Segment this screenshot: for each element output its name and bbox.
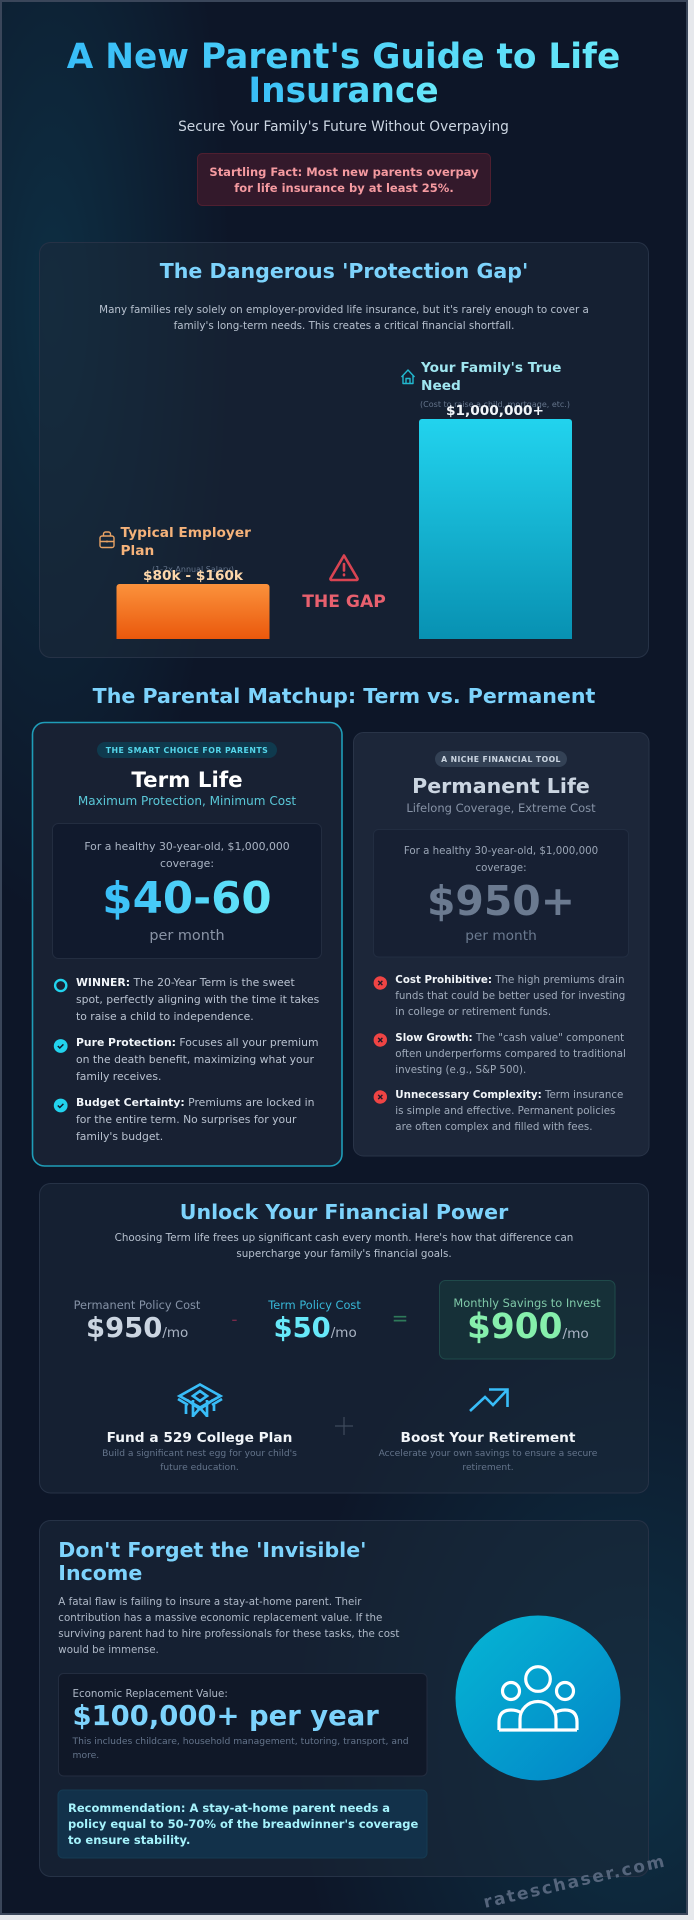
value box: [58, 1674, 427, 1776]
item: unnecessary complexity: [374, 1089, 623, 1133]
item: winner: [55, 976, 320, 1023]
icon: family circle: [456, 1616, 620, 1780]
item: pure protection: [54, 1036, 319, 1083]
savings box: [440, 1280, 615, 1359]
plan name: Term Life: [131, 768, 243, 793]
item: slow growth: Slow Growth: The "cash value" component: [395, 1032, 624, 1044]
goal: college plan: future education.: [160, 1463, 239, 1473]
value box: Economic Replacement Value:: [72, 1688, 228, 1700]
panel: protection gap: [40, 242, 648, 658]
header: [67, 37, 620, 206]
panel: financial power: [40, 1184, 648, 1493]
badge: [435, 751, 567, 767]
price box: per month: [465, 928, 537, 944]
value box: This includes childcare, household management, tutoring, transport, and: [72, 1736, 409, 1747]
badge: [97, 742, 277, 758]
plus sign: [335, 1417, 353, 1435]
item: winner: WINNER: The 20-Year Term is the sweet: [76, 976, 295, 989]
value box: more.: [72, 1750, 99, 1761]
icon: house: [402, 370, 414, 384]
price box: For a healthy 30-year-old, $1,000,000: [84, 840, 290, 853]
body text: A fatal flaw is failing to insure a stay-at-home parent. Their: [58, 1596, 362, 1608]
item: pure protection: Pure Protection: Focuses all your premium: [76, 1036, 318, 1049]
price box: coverage:: [160, 857, 214, 870]
panel: invisible income: [40, 1520, 648, 1876]
badge: A NICHE FINANCIAL TOOL: [441, 755, 561, 764]
price box: per month: [149, 928, 225, 944]
item: budget certainty: family's budget.: [76, 1130, 163, 1143]
bar: employer plan: (1-2x Annual Salary): [152, 565, 234, 574]
savings box: $900/mo: [467, 1307, 589, 1347]
heading: [58, 1538, 366, 1585]
item: slow growth: often underperforms compared to traditional: [395, 1048, 626, 1060]
body text: surviving parent had to hire professionals for these tasks, the cost: [58, 1628, 399, 1640]
icon: warning triangle: [330, 556, 358, 580]
recommendation: [58, 1790, 427, 1858]
intro text: [99, 304, 589, 332]
bar: family need: Need: [421, 378, 461, 394]
the gap: [302, 556, 386, 612]
icon: briefcase: [100, 532, 114, 548]
item: budget certainty: [54, 1096, 315, 1143]
goal: retirement: [379, 1390, 598, 1473]
section heading: matchup: The Parental Matchup: Term vs. Permanent: [93, 684, 595, 708]
heading: Income: [58, 1561, 142, 1585]
recommendation: policy equal to 50-70% of the breadwinner's coverage: [68, 1817, 419, 1831]
equation: permanent cost: [74, 1298, 201, 1344]
equation: term cost: $50/mo: [274, 1313, 357, 1344]
item: pure protection: family receives.: [76, 1070, 161, 1083]
item: cost prohibitive: Cost Prohibitive: The high premiums drain: [395, 974, 624, 986]
intro text: family's long-term needs. This creates a critical financial shortfall.: [174, 320, 514, 332]
item: cost prohibitive: [374, 974, 625, 1018]
item: pure protection: on the death benefit, maximizing what your: [76, 1053, 314, 1066]
badge: THE SMART CHOICE FOR PARENTS: [106, 746, 268, 755]
bar: family need: (Cost to raise a child, mortgage, etc.): [420, 400, 570, 409]
intro text: supercharge your family's financial goals.: [236, 1248, 452, 1260]
equals sign: =: [392, 1306, 408, 1330]
price box: For a healthy 30-year-old, $1,000,000: [404, 845, 598, 857]
startling fact callout: [198, 154, 490, 206]
heading: Unlock Your Financial Power: [180, 1200, 509, 1224]
intro text: [115, 1232, 573, 1260]
goal: college plan: [102, 1384, 297, 1473]
body text: would be immense.: [58, 1644, 159, 1656]
recommendation: to ensure stability.: [68, 1833, 190, 1847]
price box: $950+: [427, 877, 575, 925]
price box: [52, 824, 322, 958]
equation: term cost: Term Policy Cost: [267, 1298, 361, 1312]
heading: Don't Forget the 'Invisible': [58, 1538, 366, 1562]
goal: retirement: retirement.: [462, 1463, 514, 1473]
item: unnecessary complexity: Unnecessary Complexity: Term insurance: [395, 1089, 623, 1101]
body text: [58, 1596, 399, 1656]
bar: family need: Your Family's True: [420, 360, 561, 376]
item: cost prohibitive: in college or retirement funds.: [395, 1006, 551, 1018]
the gap: THE GAP: [302, 592, 386, 612]
item: budget certainty: Budget Certainty: Premiums are locked in: [76, 1096, 314, 1109]
bar: employer plan: Typical Employer: [120, 525, 251, 541]
body text: contribution has a massive economic replacement value. If the: [58, 1612, 382, 1624]
value box: $100,000+ per year: [72, 1701, 379, 1732]
item: cost prohibitive: funds that could be better used for investing: [395, 990, 625, 1002]
item: unnecessary complexity: is simple and effective. Permanent policies: [395, 1105, 615, 1117]
equation: permanent cost: $950/mo: [86, 1313, 188, 1344]
goal: retirement: Boost Your Retirement: [401, 1430, 576, 1446]
equation: term cost: [267, 1298, 361, 1344]
subtitle: Secure Your Family's Future Without Overpaying: [178, 119, 509, 135]
intro text: Many families rely solely on employer-provided life insurance, but it's rarely enough to cover a: [99, 304, 589, 316]
panel: permanent life: [354, 732, 649, 1156]
drawback list: [374, 974, 626, 1133]
price box: coverage:: [475, 862, 527, 874]
plan tagline: Lifelong Coverage, Extreme Cost: [406, 801, 596, 815]
item: slow growth: [374, 1032, 626, 1076]
plan name: Permanent Life: [412, 774, 590, 798]
startling fact callout: Startling Fact: Most new parents overpay: [209, 165, 479, 179]
minus sign: -: [231, 1310, 238, 1330]
savings box: Monthly Savings to Invest: [453, 1296, 601, 1310]
item: winner: to raise a child to independence.: [76, 1010, 254, 1023]
equation: permanent cost: Permanent Policy Cost: [74, 1298, 201, 1312]
title: Insurance: [248, 71, 439, 111]
goal: retirement: Accelerate your own savings to ensure a secure: [379, 1449, 598, 1459]
bar: family need: [402, 360, 572, 639]
price box: $40-60: [102, 874, 272, 924]
goal: college plan: Fund a 529 College Plan: [107, 1430, 292, 1446]
price box: [374, 830, 628, 957]
bar: family need: $1,000,000+: [446, 403, 544, 419]
heading: The Dangerous 'Protection Gap': [160, 259, 528, 283]
title: [67, 37, 620, 111]
bar: employer plan: Plan: [120, 543, 154, 559]
icon: growth arrow: [470, 1390, 508, 1411]
plan tagline: Maximum Protection, Minimum Cost: [78, 794, 296, 808]
icon: graduation cap: [178, 1384, 222, 1417]
title: A New Parent's Guide to Life: [67, 37, 620, 77]
bar: employer plan: $80k - $160k: [143, 568, 244, 584]
intro text: Choosing Term life frees up significant cash every month. Here's how that difference can: [115, 1232, 573, 1244]
watermark: rateschaser.com: [482, 1851, 668, 1913]
recommendation: Recommendation: A stay-at-home parent needs a: [68, 1801, 390, 1815]
bar: employer plan: [100, 525, 270, 639]
item: winner: spot, perfectly aligning with the time it takes: [76, 993, 320, 1006]
item: unnecessary complexity: are often complex and filled with fees.: [395, 1121, 593, 1133]
item: budget certainty: for the entire term. No surprises for your: [76, 1113, 297, 1126]
panel: term life: [32, 722, 342, 1166]
startling fact callout: for life insurance by at least 25%.: [234, 181, 454, 195]
goal: college plan: Build a significant nest egg for your child's: [102, 1449, 297, 1459]
benefit list: [54, 976, 320, 1143]
item: slow growth: investing (e.g., S&P 500).: [395, 1064, 526, 1076]
